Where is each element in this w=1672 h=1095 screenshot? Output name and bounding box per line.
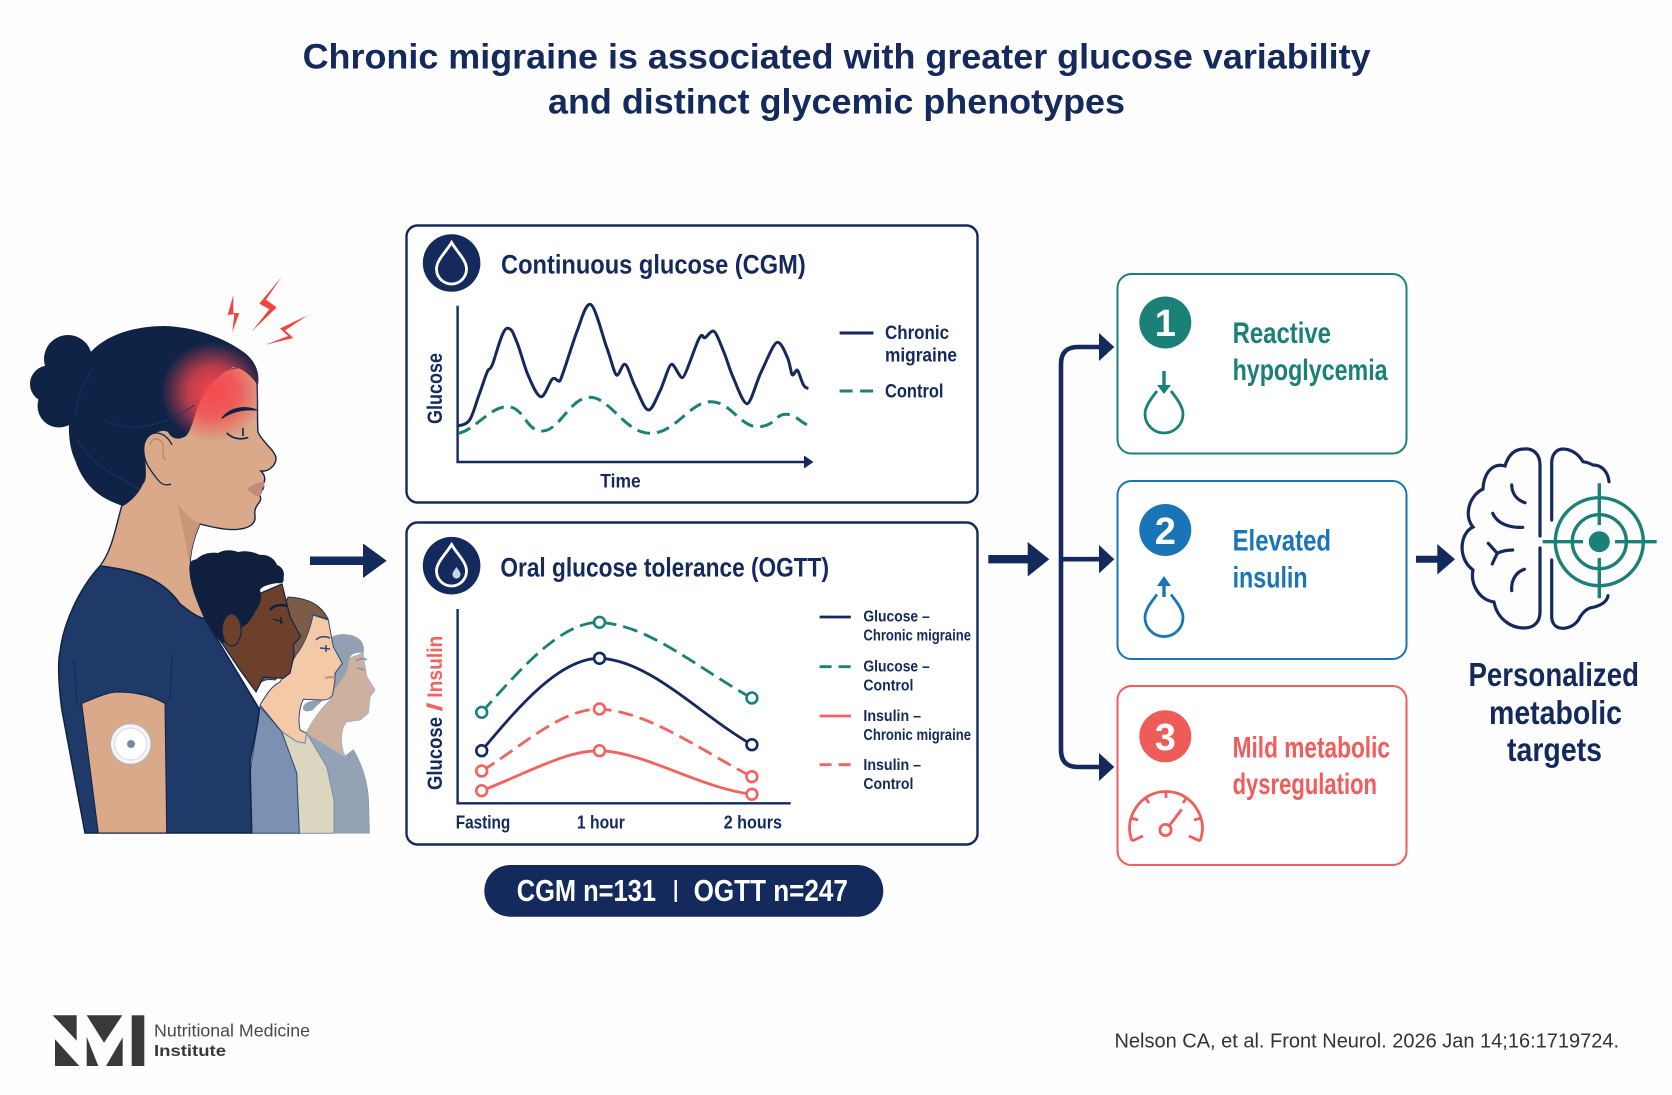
icon: drop with up arrow: [1145, 576, 1183, 636]
branching arrows: [1061, 333, 1114, 781]
chart: OGTT line chart: Insulin: [424, 636, 447, 698]
legend: OGTT: Chronic migraine: [863, 727, 971, 744]
number badge 1: 1: [1155, 303, 1176, 345]
sleeve seams: [74, 655, 172, 706]
glucose sensor: [110, 724, 151, 764]
chart: OGTT line chart: 1 hour: [577, 811, 625, 832]
legend: OGTT: Glucose –: [863, 659, 930, 676]
brain outline: [1462, 449, 1609, 628]
cream shirt: [282, 732, 334, 833]
panel heading: Oral glucose tolerance (OGTT): [500, 553, 829, 583]
panel: oral glucose tolerance OGTT: [406, 522, 978, 844]
eyebrow: [222, 408, 257, 418]
brow and eye: [316, 637, 330, 652]
number badge 2: 2: [1155, 511, 1176, 553]
title: Chronic migraine is associated with greater glucose variability: [303, 38, 1371, 76]
legend: CGM: [840, 323, 957, 403]
card 2: elevated insulin: [1118, 481, 1406, 659]
arrow: participants to tests: [310, 544, 387, 578]
chart: OGTT line chart: 2 hours: [724, 811, 782, 832]
logo: Nutritional Medicine Institute: Nutritional Medicine: [154, 1021, 310, 1041]
ear: [144, 433, 172, 485]
legend: CGM: migraine: [885, 346, 957, 367]
figure: woman with migraine: [30, 277, 308, 833]
legend: CGM: Control: [885, 382, 944, 403]
legend: OGTT: [820, 609, 971, 793]
panel: continuous glucose CGM: [406, 226, 978, 502]
target: [1543, 483, 1657, 598]
citation: Nelson CA, et al. Front Neurol. 2026 Jan 14;16:1719724.: [1114, 1030, 1619, 1052]
chart: OGTT line chart: /: [424, 702, 447, 712]
jaw shadow: [177, 503, 200, 567]
outcome label: [1468, 656, 1639, 768]
card label: insulin: [1233, 561, 1308, 594]
sample size pill: OGTT n=247: [694, 873, 848, 908]
hair bun: [30, 335, 92, 428]
logo: Nutritional Medicine Institute: [53, 1015, 310, 1066]
card label: Reactive: [1233, 317, 1331, 350]
legend: OGTT: Glucose –: [863, 609, 930, 626]
neck and face: [100, 365, 276, 619]
hair strands: [76, 370, 195, 490]
figure: third person faded: [303, 634, 375, 833]
card label: [1233, 524, 1331, 594]
shirt: [59, 566, 259, 833]
chart: CGM line chart: [424, 304, 814, 492]
card label: Elevated: [1233, 524, 1331, 558]
panel heading: Continuous glucose (CGM): [501, 249, 806, 279]
arrow: phenotypes to targets: [1416, 544, 1455, 575]
logo: Nutritional Medicine Institute: Institute: [154, 1043, 226, 1060]
figure: man with dark hair: [185, 550, 301, 692]
chart: CGM line chart: Time: [600, 471, 641, 492]
card label: [1233, 732, 1390, 801]
outcome label: metabolic: [1489, 694, 1622, 731]
title: [303, 38, 1371, 122]
icon: drop with down arrow: [1145, 371, 1183, 433]
legend: OGTT: Control: [863, 776, 913, 793]
card 3: mild metabolic dysregulation: [1118, 686, 1406, 865]
icon: brain with target: [1462, 449, 1657, 628]
card label: dysregulation: [1233, 768, 1377, 801]
lightning bolts: [228, 277, 308, 345]
sample size pill: [484, 865, 883, 917]
arrow: tests to phenotypes: [988, 542, 1049, 576]
legend: CGM: Chronic: [885, 323, 949, 344]
lips: [247, 482, 264, 496]
faded eye: [356, 659, 367, 670]
card label: Mild metabolic: [1233, 732, 1390, 764]
illustration: patients with migraine: [30, 277, 375, 833]
chart: OGTT line chart: Fasting: [456, 811, 510, 832]
chart: CGM line chart: Glucose: [424, 353, 447, 424]
inner ear: [150, 439, 166, 460]
chart: OGTT line chart: Glucose: [424, 717, 447, 790]
legend: OGTT: Chronic migraine: [863, 627, 971, 644]
figure: second person: [250, 597, 342, 833]
icon: drop with small drop: [423, 537, 480, 594]
outcome label: Personalized: [1468, 656, 1639, 693]
closed eye: [227, 428, 248, 439]
hair: [69, 326, 258, 506]
number badge 3: 3: [1155, 717, 1176, 759]
number badge 2: [1139, 504, 1191, 556]
icon: gauge: [1130, 792, 1202, 841]
lips: [325, 676, 335, 679]
icon: water drop: [423, 234, 480, 292]
legend: OGTT: Insulin –: [863, 757, 921, 774]
chart: OGTT line chart: [424, 609, 791, 832]
card label: hypoglycemia: [1233, 354, 1388, 387]
cardigan: [250, 707, 299, 833]
number badge 3: [1139, 710, 1191, 762]
legend: OGTT: Insulin –: [863, 708, 921, 725]
arm: [82, 692, 167, 833]
title: and distinct glycemic phenotypes: [548, 82, 1125, 122]
card label: [1233, 317, 1388, 387]
card 1: reactive hypoglycemia: [1118, 274, 1406, 454]
number badge 1: [1139, 296, 1191, 348]
legend: OGTT: Control: [863, 677, 913, 694]
outcome label: targets: [1507, 731, 1602, 768]
sample size pill: CGM n=131: [517, 873, 656, 908]
red pain glow: [162, 343, 258, 440]
